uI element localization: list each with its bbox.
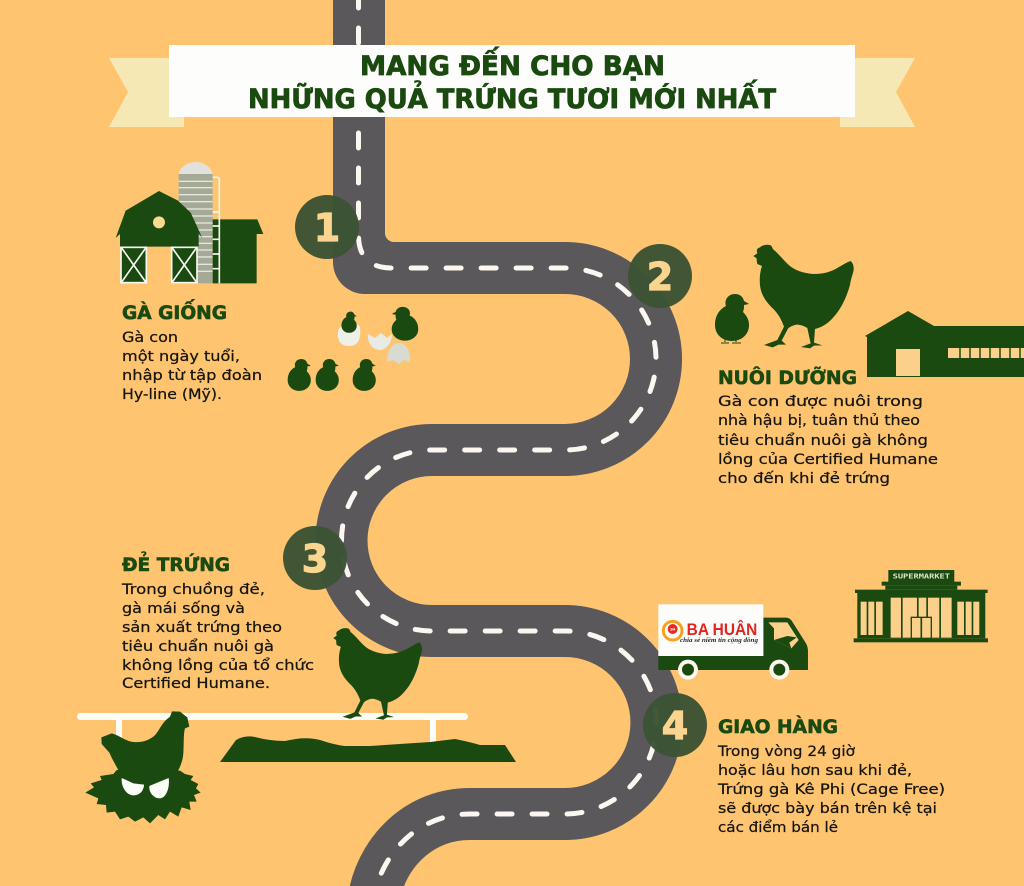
icon: farm barn and silo (116, 162, 263, 283)
text: Gà Giống description (122, 330, 262, 403)
text: Giao Hàng description: sẽ được bày bán trên kệ tại (718, 801, 937, 817)
icon: hen on nest (85, 711, 201, 823)
icon: hen on perch (333, 628, 422, 720)
text: Nuôi Dưỡng description: nhà hậu bị, tuân thủ theo (718, 413, 920, 429)
title (248, 47, 777, 115)
text: Gà Giống description: nhập từ tập đoàn (122, 368, 262, 384)
icon: white perch (77, 713, 468, 743)
ribbon tail left (109, 58, 184, 127)
logo: Ba Huân (663, 620, 758, 644)
text: Nuôi Dưỡng description (718, 394, 938, 487)
step 3 number badge: 3 (302, 537, 328, 581)
step 3 number badge (283, 526, 347, 590)
text: Nuôi Dưỡng description: tiêu chuẩn nuôi gà không (718, 432, 928, 449)
text: Nuôi Dưỡng description: lồng của Certified Humane (718, 451, 938, 468)
step 2 number badge: 2 (647, 255, 673, 299)
icon: delivery truck (658, 604, 808, 680)
heading: Gà Giống: GÀ GIỐNG (122, 300, 227, 324)
text: Giao Hàng description: hoặc lâu hơn sau khi đẻ, (718, 763, 912, 779)
icon: supermarket: SUPERMARKET (893, 573, 950, 581)
icon: hen (753, 245, 854, 348)
text: Đẻ Trứng description: gà mái sống và (122, 600, 245, 617)
banner plate (169, 45, 855, 117)
text: Đẻ Trứng description: Certified Humane. (122, 676, 270, 692)
step 1 number badge: 1 (314, 206, 340, 250)
icon: chick (715, 294, 749, 343)
text: Đẻ Trứng description: Trong chuồng đẻ, (121, 581, 265, 598)
text: Gà Giống description: một ngày tuổi, (122, 348, 240, 365)
text: Đẻ Trứng description: không lồng của tổ chức (122, 657, 314, 674)
title: NHỮNG QUẢ TRỨNG TƯƠI MỚI NHẤT (248, 79, 777, 115)
icon: three chicks (288, 359, 376, 391)
text: Nuôi Dưỡng description: Gà con được nuôi trong (718, 394, 923, 410)
winding road (333, 0, 656, 886)
text: Đẻ Trứng description: tiêu chuẩn nuôi gà (122, 638, 274, 655)
text: Gà Giống description: Gà con (122, 330, 178, 346)
icon: hatching chicks and eggs (338, 307, 418, 364)
heading: Đẻ Trứng: ĐẺ TRỨNG (122, 553, 230, 576)
logo: Ba Huân: 3H (670, 626, 675, 631)
text: Giao Hàng description: Trứng gà Kê Phi (Cage Free) (717, 782, 945, 798)
logo: Ba Huân: chia sẻ niềm tin cộng đồng (680, 637, 758, 644)
text: Giao Hàng description: Trong vòng 24 giờ (717, 744, 855, 760)
icon: supermarket (854, 570, 988, 642)
title banner (109, 45, 915, 127)
truck wheels (678, 660, 698, 680)
step 4 number badge: 4 (662, 704, 688, 748)
logo: Ba Huân: BA HUÂN (687, 620, 757, 639)
text: Đẻ Trứng description: sản xuất trứng theo (122, 620, 282, 636)
text: Đẻ Trứng description (121, 581, 314, 692)
step 1 number badge (295, 195, 359, 259)
text: Giao Hàng description (717, 744, 945, 836)
text: Giao Hàng description: các điểm bán lẻ (718, 819, 838, 836)
ribbon tail right (840, 58, 915, 127)
icon: ground mound (220, 736, 516, 762)
heading: Nuôi Dưỡng: NUÔI DƯỠNG (718, 366, 857, 389)
text: Nuôi Dưỡng description: cho đến khi đẻ trứng (718, 470, 890, 487)
step 2 number badge (628, 244, 692, 308)
icon: poultry house (865, 311, 1024, 377)
step 4 number badge (643, 693, 707, 757)
title: MANG ĐẾN CHO BẠN (360, 47, 665, 82)
heading: Giao Hàng: GIAO HÀNG (718, 716, 838, 738)
text: Gà Giống description: Hy-line (Mỹ). (122, 387, 222, 403)
